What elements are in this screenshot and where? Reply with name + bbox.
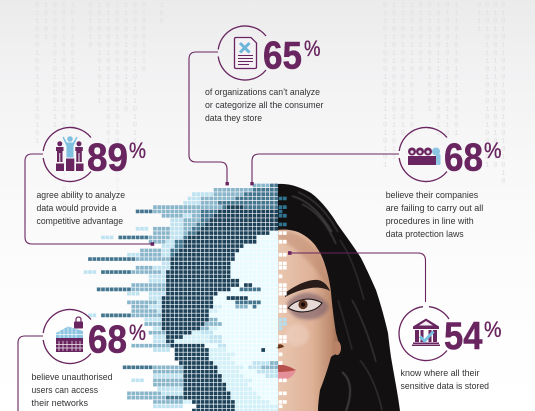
binary digits right: 011100101 101011011 111001101 000100000 110001001 101111010 010100101 010111110 001000101 1001 1010 0010 0101 0001 1001 1110 0100 1001 1010 1101 010 0110 110 1101 101 00 11 01 1	[383, 2, 463, 170]
icon: bank with check	[412, 318, 440, 346]
binary digits far right: 0000 1111 1000 1111 000 101 101 110 010 110 001 010 000 110 001 100 010 001 010 011 100 1 0	[477, 2, 509, 186]
binary digits left lower: 0 0 1 1 0 0 0 1 1 0 1	[62, 162, 124, 218]
connector: right 68% to head	[250, 154, 399, 185]
circle ring 54	[399, 307, 449, 361]
text: lower left 68% description: believe unauthorised	[32, 372, 112, 382]
icon: group of people	[408, 148, 440, 165]
panel: right 68%	[386, 127, 502, 239]
text: 54% description: know where all their	[400, 368, 480, 378]
circle ring 89	[43, 127, 91, 182]
text: right 68% description: are failing to carry out all	[386, 203, 483, 213]
panel: 54%	[399, 307, 502, 391]
text: right 68% description: believe their companies	[386, 190, 479, 200]
panel: 54%: %	[484, 317, 502, 342]
face skin	[278, 230, 341, 411]
number lower left 68%: 68	[88, 318, 127, 362]
panel: right 68%: %	[484, 138, 502, 163]
text: right 68% description: data protection laws	[386, 229, 464, 239]
text: 54% description: sensitive data is stored	[400, 381, 489, 391]
panel: lower left 68%: %	[129, 320, 146, 345]
text: lower left 68% description: users can access	[32, 385, 98, 395]
number 65%: 65	[263, 34, 302, 78]
icon: document with x	[234, 38, 256, 68]
panel: 65%	[205, 26, 324, 123]
text: 65% description: or categorize all the consumer	[205, 100, 324, 110]
circle ring 65	[218, 26, 266, 80]
text: 89% description: data would provide a	[36, 203, 117, 213]
ear	[333, 341, 341, 355]
binary digits left: 01011 0101100 1 10100 0010101 0 11011 1110000 0 00000 0000010 01011 1101000 0 100 0000101 1 010 110010 0 101 000011 0 010 101010 1 111 01010 1 001 11001 1 001 01100 0 000 10011 1 111 1100 0 100 00 1 1 101 11 0 0 00 1 1 10 1	[35, 2, 169, 146]
cheek highlight	[285, 324, 309, 346]
circle ring lower left 68	[43, 309, 91, 364]
nostril	[276, 344, 284, 349]
connector: lower left 68%	[18, 336, 43, 411]
number right 68%: 68	[444, 136, 483, 180]
icon: people on podiums	[56, 136, 84, 171]
circle ring right 68	[399, 127, 447, 182]
panel: 89%: %	[129, 138, 146, 163]
hair	[278, 184, 400, 411]
eye	[288, 299, 322, 312]
number 54%: 54	[444, 315, 483, 358]
lips	[278, 365, 296, 380]
icon: locked building	[56, 317, 83, 352]
text: 65% description: of organizations can’t analyze	[205, 87, 320, 97]
panel: lower left 68%	[32, 309, 146, 408]
text: 65% description: data they store	[205, 113, 262, 123]
forehead shading	[278, 230, 328, 285]
panel: 65%: %	[304, 36, 320, 61]
text: 89% description: competitive advantage	[36, 216, 123, 226]
hair highlights	[292, 192, 382, 411]
connector: 89% to face	[25, 154, 154, 246]
eye socket shadow	[287, 293, 329, 320]
eyebrow	[285, 280, 330, 297]
connector: 65% to head	[189, 52, 229, 185]
text: right 68% description: procedures in line with	[386, 216, 474, 226]
number 89%: 89	[87, 136, 128, 180]
text: 89% description: agree ability to analyze	[36, 190, 125, 200]
panel: 89%	[36, 127, 146, 226]
text: lower left 68% description: their networks	[32, 398, 88, 408]
connector: 54% to face	[288, 251, 426, 302]
